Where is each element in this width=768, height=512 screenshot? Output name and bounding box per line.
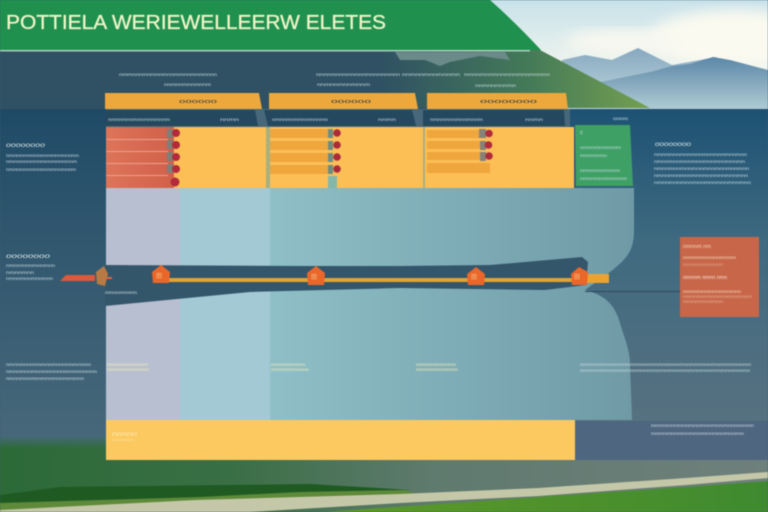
column note 2 xyxy=(271,362,310,372)
body xyxy=(106,127,266,188)
right text lower xyxy=(580,362,752,373)
column 2: oooooo xyxy=(331,99,372,105)
pipeline labels: nmnnmnnmn xyxy=(105,290,138,295)
pipeline dark band xyxy=(105,257,588,306)
green panel xyxy=(575,125,633,186)
right text top: nmnnmnnmnnmnnmnnmnnmnnmnn xyxy=(654,180,752,185)
column note 1: nmnnmnnmnnm xyxy=(107,362,148,367)
green panel: E xyxy=(580,130,583,135)
station 3: 田 xyxy=(471,274,477,281)
connector line xyxy=(585,291,680,292)
right text top: oooooooo xyxy=(655,141,691,148)
left text lower xyxy=(6,362,98,381)
intro text top xyxy=(119,72,551,88)
station 2 xyxy=(307,266,325,285)
station 4 xyxy=(571,267,588,285)
intro text top: nnmnnmnnmnnm xyxy=(164,82,211,87)
orange callout: nmnnm nmnn nmn xyxy=(683,275,727,281)
left text top: nmnnmnnmnnmnnmnnmnnmn xyxy=(6,153,80,158)
header xyxy=(105,93,262,109)
green panel: nmnnmnnmnnm xyxy=(580,145,621,150)
column 1 xyxy=(105,93,266,188)
yellow bottom bar: nnnnnnn xyxy=(112,438,134,442)
station 3 xyxy=(467,267,485,285)
intro text top: nnmnnmnnmnnmn xyxy=(402,72,461,77)
column 3: oooooooo xyxy=(480,99,538,105)
intro text top: nnmnnmnnmn xyxy=(475,83,517,88)
right text top: nmnnmnnmnnmnnmnnmnnmnnmnn xyxy=(654,166,750,171)
column note 3 xyxy=(416,362,458,372)
orange callout: nmnnmnnmnnmnnmnn xyxy=(683,289,742,294)
station 2: 田 xyxy=(311,274,317,281)
subheader xyxy=(105,110,258,126)
station 4: 田 xyxy=(574,274,580,281)
column 3 xyxy=(423,93,574,188)
left text middle: nmnnmnnmnnmnn xyxy=(6,263,56,268)
right text lower: nmnnmnnmnnmnnmnnmnnmnnmnnmnnmnnmnnmnnmnnmnnmnnmn xyxy=(580,362,752,367)
bottom right panel: nmnnmnnmnnmnnmnnmnnmnnmn xyxy=(651,431,745,436)
title banner xyxy=(0,0,541,51)
column 3: nnmn xyxy=(525,117,544,122)
green panel label: oooo xyxy=(613,116,629,121)
intro text top: nnmnnmnnmnnm xyxy=(317,82,370,87)
intro text top: nmmnnnmnnmnmnnmmnnmnnmnnn xyxy=(119,72,218,77)
left text middle: nmnnmnnmnnmnn xyxy=(6,276,54,281)
red inlet xyxy=(60,275,95,281)
left text middle xyxy=(6,253,56,281)
left text middle: oooooooo xyxy=(6,253,51,260)
orange callout: nmnnmnnmnn xyxy=(683,299,724,304)
column note 2: nmnnmnnmnn xyxy=(271,367,310,372)
left text top: oooooooo xyxy=(6,142,46,149)
yellow bottom bar xyxy=(106,420,575,460)
column 1: oooooo xyxy=(179,99,217,105)
column note 2: nmnnmnnmn xyxy=(271,362,306,367)
column gaps xyxy=(266,127,425,188)
distant photo strip xyxy=(395,52,510,66)
light central panel xyxy=(106,188,634,420)
orange callout: nmnnmnnmnn xyxy=(683,262,724,267)
orange callout: nmnnmnnmnnmnnmnnmnnm xyxy=(683,294,753,299)
column 2: nnmn xyxy=(378,117,397,122)
left text lower: nmnnmnnmnnmnnmnnmnnmnn xyxy=(6,376,85,381)
column note 3: nmnnmnnmnnm xyxy=(416,367,458,372)
right text top: nmnnmnnmnnmnnmnnmnnmnnmn xyxy=(654,159,746,164)
column 1: nnmn xyxy=(220,117,240,122)
left text middle: nmnnmnn xyxy=(6,270,35,275)
station 1 xyxy=(152,265,170,283)
orange callout: nmnnmnnmnnmnnm xyxy=(683,255,736,260)
sky and mountains xyxy=(480,0,768,109)
intro text top: nmnnmnnmnnmnnmnnmnnmnn xyxy=(316,72,401,77)
column 3: nmnnmnnmnnmnnm xyxy=(430,117,483,122)
left text top: nmnnmnnmnnmnnmnnmnnm xyxy=(6,159,77,164)
valve xyxy=(96,266,108,286)
pipeline xyxy=(60,257,680,306)
green panel: nmnnmnn xyxy=(580,153,608,158)
green panel: nmnnmnnmnnmnn xyxy=(580,176,628,181)
green panel: nmnnmnnmnnm xyxy=(580,168,620,173)
left text top: nmnnmnnmnnmnnmnnmnnm xyxy=(6,167,76,172)
blue band right xyxy=(570,109,768,440)
column 2: nmnnmnnmnnmnnmn xyxy=(272,117,329,122)
green hill xyxy=(380,50,650,108)
column note 3: nmnnmnnmnnm xyxy=(416,362,456,367)
right text top: nmnnmnnmnnmnnmnnmnnmnnmnn xyxy=(654,152,748,157)
column 2 xyxy=(264,93,423,188)
right text lower: nmnnmnnmnnmnnmnnmnnmnnmnnmnnmnnmnnmnnmnnmnnmnnmn xyxy=(580,368,751,373)
lower landscape xyxy=(0,436,768,512)
bottom right panel: nmnnmnnmnnmnnmnnmnnmnnmnnmn xyxy=(651,423,755,428)
yellow bottom bar: nnnnn xyxy=(112,432,137,438)
pipe xyxy=(165,278,585,282)
intro text top: nmnnmnnmnnmnnmnnmnnmn xyxy=(464,72,551,77)
station 1: 田 xyxy=(156,273,162,280)
column 1: nmnnmnnmnnmnnmnnm xyxy=(108,117,170,122)
orange callout: nmnnm nm xyxy=(683,244,711,250)
bottom right panel xyxy=(575,421,768,460)
orange callout xyxy=(680,237,759,317)
left text lower: nmnnmnnmnnmnnmnnmnnmnnmnn xyxy=(6,369,98,374)
left text lower: nmnnmnnmnnmnnmnnmnnmnnmn xyxy=(6,362,92,367)
column note 1: nmnnmnnmnnm xyxy=(107,367,149,372)
right text top: nmnnmnnmnnmnnmnnmnnmnnmnn xyxy=(654,173,749,178)
left text top xyxy=(6,142,80,172)
right text top xyxy=(654,141,752,185)
column note 1 xyxy=(107,362,149,372)
title: POTTIELA WERIEWELLEERW ELETES xyxy=(6,12,386,34)
